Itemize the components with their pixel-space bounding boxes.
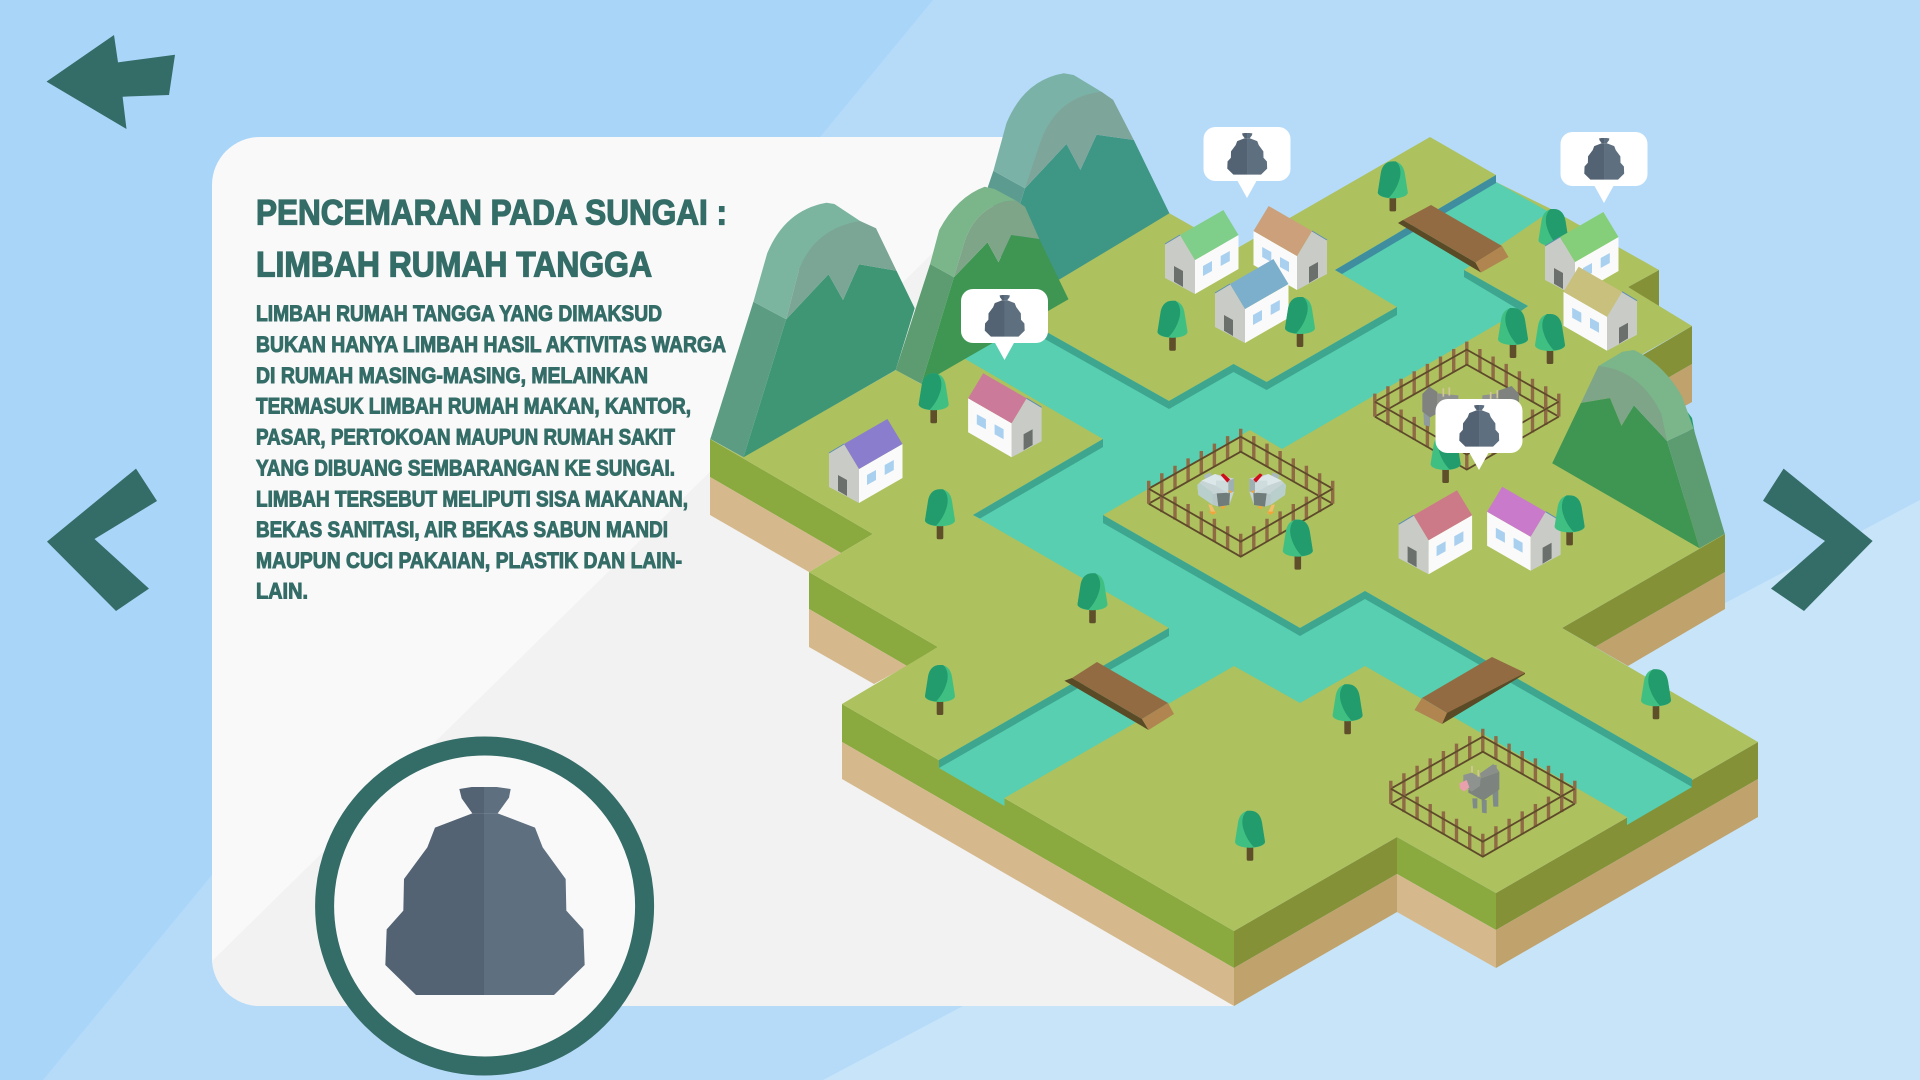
trees — [919, 161, 1671, 861]
bridge: lower left — [1064, 662, 1174, 730]
fence: chicken pen — [1149, 429, 1333, 557]
house: magenta roof — [1487, 487, 1561, 571]
body text: YANG DIBUANG SEMBARANGAN KE SUNGAI. — [256, 455, 675, 480]
body text: MAUPUN CUCI PAKAIAN, PLASTIK DAN LAIN- — [256, 548, 682, 573]
cow — [1459, 764, 1499, 813]
callout: bubble by green house — [1204, 127, 1290, 198]
mountain: left — [710, 203, 915, 457]
callout: bubble by top right house — [1560, 132, 1648, 203]
mountain: middle green — [896, 187, 1068, 384]
body text: LIMBAH RUMAH TANGGA YANG DIMAKSUD — [256, 301, 662, 326]
mountain: right — [1552, 350, 1725, 548]
callout: bubble by cow pen — [1436, 399, 1522, 470]
house: green roof — [1165, 210, 1238, 294]
icon: next chevron — [1763, 469, 1873, 611]
bridge: top — [1398, 205, 1508, 272]
house: pink roof — [968, 373, 1042, 457]
river — [939, 175, 1692, 825]
house: red roof — [1399, 490, 1472, 574]
body text: TERMASUK LIMBAH RUMAH MAKAN, KANTOR, — [256, 394, 691, 419]
body text: PASAR, PERTOKOAN MAUPUN RUMAH SAKIT — [256, 424, 675, 450]
mountain: far teal — [988, 73, 1169, 310]
isometric land: grass top — [710, 137, 1758, 931]
body text: LIMBAH TERSEBUT MELIPUTI SISA MAKANAN, — [256, 486, 688, 511]
panel: text card — [212, 137, 1234, 1006]
title: LIMBAH RUMAH TANGGA — [256, 246, 652, 285]
title — [256, 194, 727, 285]
fence: cow pen — [1375, 342, 1559, 470]
chickens — [1197, 472, 1286, 515]
body text: DI RUMAH MASING-MASING, MELAINKAN — [256, 363, 648, 388]
house: tan roof — [1254, 206, 1327, 290]
houses — [829, 206, 1637, 574]
fence: front pen — [1391, 729, 1575, 857]
icon: previous chevron — [47, 469, 157, 611]
house: purple roof — [829, 419, 902, 503]
house: blue roof — [1215, 259, 1288, 343]
tree behind green house — [1538, 209, 1568, 259]
bridge: lower right — [1414, 657, 1525, 724]
isometric land: side faces — [710, 270, 1758, 1006]
icon: garbage bag in circle — [325, 746, 645, 1066]
body text: LAIN. — [256, 578, 308, 604]
river banks — [939, 175, 1692, 787]
house: yellow roof — [1564, 267, 1637, 351]
body text: BEKAS SANITASI, AIR BEKAS SABUN MANDI — [256, 517, 668, 542]
callout: bubble by pink house — [961, 289, 1048, 360]
body text: BUKAN HANYA LIMBAH HASIL AKTIVITAS WARGA — [256, 332, 726, 357]
house: light green roof — [1545, 212, 1618, 296]
icon: back arrow — [46, 35, 175, 129]
body text — [256, 301, 726, 604]
cows behind bubble — [1422, 386, 1519, 427]
title: PENCEMARAN PADA SUNGAI : — [256, 194, 727, 232]
